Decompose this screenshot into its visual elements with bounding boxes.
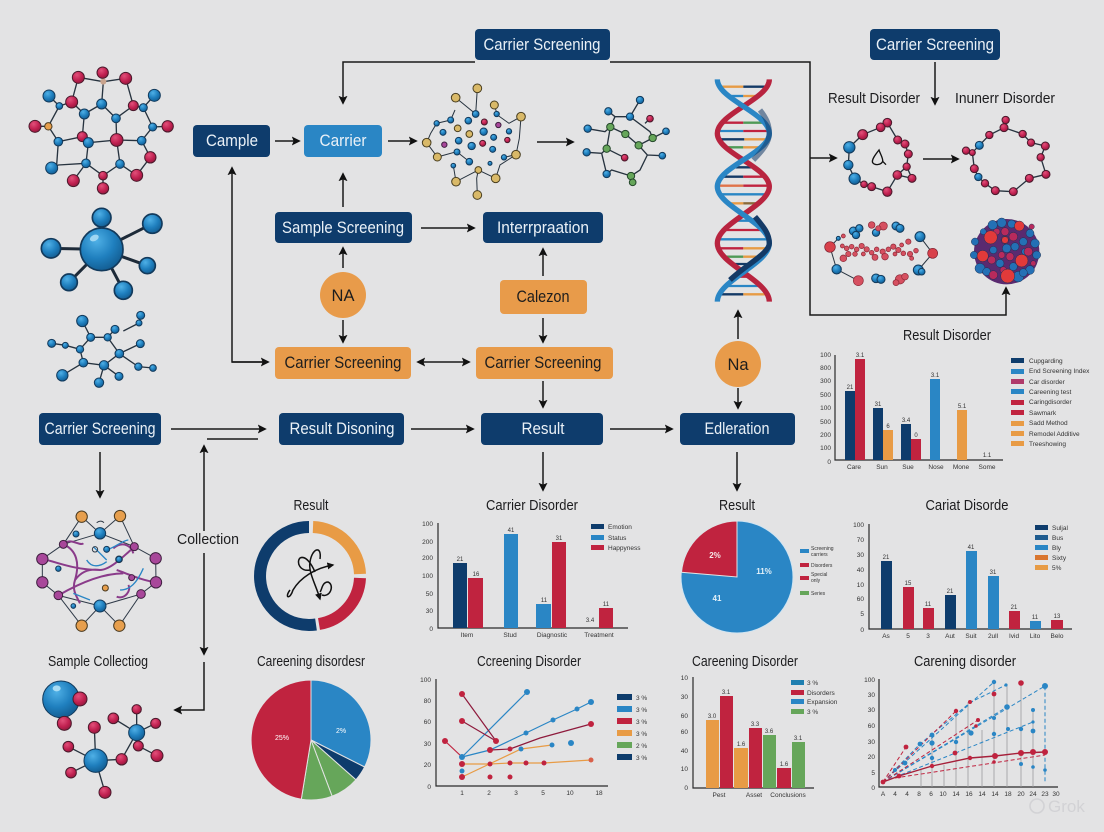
- legend: line chart: 3 %: [636, 755, 647, 762]
- bar chart: careening disorder: Asset: [746, 792, 762, 799]
- legend: carrier disorder: Happyness: [608, 545, 641, 552]
- bar chart: cariat disorde: 11: [1032, 615, 1039, 621]
- title: cariat disorde: Cariat Disorde: [926, 498, 1008, 514]
- bar chart: cariat disorde: [853, 522, 1072, 640]
- box: carrier screening left: Carrier Screening: [44, 420, 156, 438]
- title: sample collectiog: Sample Collectiog: [48, 654, 148, 670]
- legend: result pie: Screening: [811, 546, 834, 552]
- title: result pie: Result: [719, 498, 755, 514]
- scatter line chart: carening disorder: 14: [952, 791, 960, 798]
- bar chart: careening disorder: [681, 675, 814, 799]
- pie labels: 25%: [275, 735, 289, 742]
- bar chart: cariat disorde: Suit: [965, 633, 977, 640]
- bar chart: result disorder: 0: [827, 459, 831, 466]
- icon: big hub molecule: [41, 208, 162, 299]
- bar chart: result disorder: 200: [820, 432, 831, 439]
- legend: cariat disorde: [1035, 525, 1068, 572]
- bar chart: carrier disorder: 31: [556, 536, 563, 542]
- icon: ring molecule left: [844, 118, 916, 196]
- legend: result disorder: Remodel Additive: [1029, 431, 1080, 438]
- box: carrier screening left: [39, 413, 161, 445]
- pie chart: result: 11%: [756, 567, 772, 576]
- bar chart: careening disorder: 40: [681, 748, 688, 755]
- bar chart: careening disorder: 0: [684, 785, 688, 792]
- legend: result disorder: Careening test: [1029, 389, 1071, 396]
- bar chart: cariat disorde: 2ull: [988, 633, 999, 640]
- legend: result pie: Special: [811, 572, 827, 578]
- bar chart: result disorder: 3.4: [902, 418, 911, 424]
- bar chart: result disorder: 21: [847, 385, 854, 391]
- bar chart: carrier disorder: 21: [457, 557, 464, 563]
- box: carrier screening top: [475, 29, 610, 60]
- legend: carrier disorder: [591, 524, 641, 552]
- bar chart: result disorder: 100: [820, 405, 831, 412]
- bar chart: carrier disorder: 100: [422, 521, 433, 528]
- legend: careening disorder: Disorders: [807, 690, 836, 697]
- legend: careening disorder: 3 %: [807, 680, 818, 687]
- squiggle arrows in donut: [287, 550, 333, 599]
- scatter line chart: carening disorder: 18: [1004, 791, 1012, 798]
- circle: NA: NA: [332, 287, 354, 305]
- title: ccreening disorder: Ccreening Disorder: [477, 654, 581, 670]
- watermark: grok: [1030, 797, 1085, 816]
- box: carrier: Carrier: [320, 132, 367, 150]
- label: collection: Collection: [177, 532, 239, 548]
- title: careening disorder: Careening Disorder: [692, 654, 798, 670]
- bar chart: careening disorder: 10: [681, 675, 688, 682]
- bar chart: cariat disorde: 70: [857, 537, 864, 544]
- bar chart: result disorder: Sun: [876, 464, 888, 471]
- line chart: ccreening disorder: 5: [541, 790, 545, 797]
- bar chart: result disorder: 5.1: [958, 404, 967, 410]
- scatter line chart: carening disorder: 23: [1041, 791, 1049, 798]
- bar chart: cariat disorde: As: [882, 633, 891, 640]
- bar chart: careening disorder: 30: [681, 694, 688, 701]
- box: result: Result: [522, 420, 565, 438]
- bar chart: carrier disorder: 200: [422, 555, 433, 562]
- legend: cariat disorde: 5%: [1052, 565, 1062, 572]
- box: cample: [193, 125, 270, 157]
- legend: line chart: 3 %: [636, 695, 647, 702]
- legend: result pie: [800, 546, 834, 597]
- legend: careening disorder: [791, 680, 838, 716]
- bar chart: cariat disorde: 13: [1054, 614, 1061, 620]
- icon: clustered red and blue molecule: [825, 222, 938, 286]
- bar chart: carrier disorder: Diagnostic: [537, 632, 568, 639]
- icon: complex purple network: [37, 510, 162, 631]
- box: edleration: Edleration: [704, 420, 770, 438]
- bar chart: cariat disorde: 11: [925, 602, 932, 608]
- bar chart: result disorder: 500: [820, 419, 831, 426]
- legend: result disorder: [1011, 358, 1090, 448]
- box: cample: Cample: [206, 132, 258, 150]
- box: result disoning: Result Disoning: [290, 420, 394, 438]
- bar chart: cariat disorde: 41: [968, 545, 975, 551]
- scatter line chart: carening disorder: 0: [871, 785, 875, 792]
- legend: cariat disorde: Bus: [1052, 535, 1064, 542]
- scatter line chart: carening disorder: 10: [939, 791, 947, 798]
- legend: result pie: Disorders: [811, 563, 833, 569]
- line chart: ccreening disorder: 2: [487, 790, 491, 797]
- scatter line chart: carening disorder: 30: [1052, 791, 1060, 798]
- bar chart: result disorder: 100: [820, 352, 831, 359]
- scatter line chart: carening disorder: 5: [871, 770, 875, 777]
- legend: result disorder: Caringdisorder: [1029, 399, 1072, 406]
- legend: result disorder: End Screening Index: [1029, 368, 1090, 375]
- legend: result pie: only: [811, 578, 821, 584]
- bar chart: cariat disorde: Ivid: [1009, 633, 1019, 640]
- bar chart: result disorder: [820, 352, 1003, 471]
- watermark: grok: Grok: [1048, 797, 1085, 816]
- scatter line chart: carening disorder: A: [881, 791, 886, 798]
- legend: result pie: Series: [811, 591, 826, 597]
- legend: line chart: 3 %: [636, 731, 647, 738]
- legend: line chart: [617, 694, 647, 762]
- scatter line chart: carening disorder: 24: [1029, 791, 1037, 798]
- scatter line chart: carening disorder: 16: [965, 791, 973, 798]
- box: sample screening: [275, 212, 412, 243]
- scatter line chart: carening disorder: 20: [1017, 791, 1025, 798]
- box: carrier screening orange right: Carrier Screening: [484, 354, 602, 372]
- bar chart: carrier disorder: 3.4: [586, 618, 595, 624]
- bar chart: careening disorder: 3.3: [751, 722, 760, 728]
- box: result: [481, 413, 603, 445]
- legend: result disorder: Sawmark: [1029, 410, 1057, 417]
- box: carrier screening top right: [870, 29, 1000, 60]
- line chart: ccreening disorder: 10: [566, 790, 574, 797]
- bar chart: carrier disorder: 41: [508, 528, 515, 534]
- legend: careening disorder: Expansion: [807, 699, 838, 706]
- bar chart: cariat disorde: 21: [947, 589, 954, 595]
- circle: Na: Na: [727, 356, 749, 374]
- bar chart: cariat disorde: 5: [906, 633, 910, 640]
- pie labels: 2%: [336, 728, 346, 735]
- scatter line chart: carening disorder: 8: [917, 791, 921, 798]
- title: result donut: Result: [294, 498, 328, 514]
- bar chart: cariat disorde: 3: [926, 633, 930, 640]
- scatter line chart: carening disorder: 4: [905, 791, 909, 798]
- bar chart: careening disorder: 10: [681, 766, 688, 773]
- line chart: ccreening disorder: 30: [424, 741, 431, 748]
- legend: careening disorder: 3 %: [807, 709, 818, 716]
- icon: protein ball: [970, 218, 1041, 284]
- box: carrier screening orange right: [476, 347, 613, 379]
- bar chart: result disorder: 31: [875, 402, 882, 408]
- bar chart: cariat disorde: 40: [857, 567, 864, 574]
- title: carrier disorder: Carrier Disorder: [486, 498, 578, 514]
- scatter line chart: carening disorder: 30: [868, 739, 875, 746]
- scatter line chart: carening disorder: 30: [868, 707, 875, 714]
- bar chart: carrier disorder: 200: [422, 539, 433, 546]
- legend: carrier disorder: Emotion: [608, 524, 632, 531]
- box: calezon: [500, 280, 587, 314]
- bar chart: cariat disorde: Lito: [1030, 633, 1041, 640]
- legend: carrier disorder: Status: [608, 535, 627, 542]
- icon: molecule network top left: [29, 67, 173, 194]
- title: result disorder chart: Result Disorder: [903, 328, 991, 344]
- pie chart: result: [681, 521, 793, 633]
- bar chart: cariat disorde: 0: [860, 627, 864, 634]
- donut chart: result: [260, 527, 360, 625]
- pie labels: [275, 728, 346, 742]
- bar chart: result disorder: 800: [820, 365, 831, 372]
- scatter line chart: carening disorder: 6: [929, 791, 933, 798]
- box: carrier screening top right: Carrier Screening: [876, 36, 994, 54]
- legend: result disorder: Car disorder: [1029, 379, 1066, 386]
- scatter line chart: carening disorder: 14: [991, 791, 999, 798]
- bar chart: careening disorder: Conclusions: [770, 792, 806, 799]
- box: carrier screening orange left: Carrier Screening: [284, 354, 402, 372]
- line chart: ccreening disorder: 1: [460, 790, 464, 797]
- bar chart: result disorder: 3.1: [931, 373, 940, 379]
- bar chart: carrier disorder: 11: [541, 598, 548, 604]
- line chart: ccreening disorder: 80: [424, 698, 431, 705]
- icon: bottom left molecule with large sphere: [43, 681, 163, 798]
- bar chart: carrier disorder: Treatment: [584, 632, 614, 639]
- scatter line chart: carening disorder: 100: [864, 677, 875, 684]
- bar chart: cariat disorde: 30: [857, 552, 864, 559]
- legend: line chart: 3 %: [636, 707, 647, 714]
- line chart: ccreening disorder: 0: [427, 784, 431, 791]
- bar chart: cariat disorde: 21: [1011, 605, 1018, 611]
- bar chart: careening disorder: 1.6: [780, 762, 789, 768]
- box: interrpraation: [483, 212, 603, 243]
- bar chart: result disorder: 6: [886, 424, 890, 430]
- box: sample screening: Sample Screening: [282, 219, 404, 237]
- legend: cariat disorde: Bly: [1052, 545, 1062, 552]
- bar chart: carrier disorder: 50: [426, 591, 433, 598]
- bar chart: result disorder: Nose: [928, 464, 944, 471]
- legend: result disorder: Sadd Method: [1029, 420, 1068, 427]
- box: carrier screening orange left: [275, 347, 411, 379]
- bar chart: carrier disorder: Item: [461, 632, 473, 639]
- bar chart: result disorder: 300: [820, 378, 831, 385]
- pie chart: result: 2%: [709, 551, 721, 560]
- bar chart: carrier disorder: [422, 521, 628, 639]
- bar chart: carrier disorder: 16: [473, 572, 480, 578]
- circle: NA: [320, 272, 366, 318]
- bar chart: carrier disorder: Stud: [503, 632, 517, 639]
- box: carrier: [304, 125, 382, 157]
- line chart: ccreening disorder: 3: [514, 790, 518, 797]
- scatter line chart: carening disorder: 14: [978, 791, 986, 798]
- scatter line chart: carening disorder: 20: [868, 754, 875, 761]
- line chart: ccreening disorder: 100: [420, 677, 431, 684]
- bar chart: cariat disorde: 15: [905, 581, 912, 587]
- pie chart: result: 41: [713, 594, 722, 603]
- bar chart: careening disorder: 1.6: [737, 742, 746, 748]
- bar chart: result disorder: 3.1: [856, 353, 865, 359]
- bar chart: cariat disorde: Belo: [1050, 633, 1064, 640]
- icon: green and blue molecule: [583, 96, 669, 186]
- bar chart: cariat disorde: 10: [857, 582, 864, 589]
- bar chart: result disorder: Sue: [902, 464, 914, 471]
- bar chart: cariat disorde: 5: [860, 611, 864, 618]
- pie chart: careening disorder: [251, 680, 371, 800]
- legend: cariat disorde: Suljal: [1052, 525, 1068, 532]
- icon: DNA double helix: [717, 79, 770, 302]
- box: interrpraation: Interrpraation: [497, 219, 589, 237]
- title: carening disorder: Carening disorder: [914, 654, 1016, 670]
- title: careening disordesr: Careening disordesr: [257, 654, 365, 670]
- icon: ring molecule right: [962, 116, 1050, 196]
- bar chart: result disorder: 0: [914, 433, 918, 439]
- legend: line chart: 3 %: [636, 719, 647, 726]
- line chart: ccreening disorder: 60: [424, 719, 431, 726]
- scatter line chart: carening disorder: 30: [868, 692, 875, 699]
- line chart: ccreening disorder: 18: [595, 790, 603, 797]
- icon: small blue molecule: [48, 311, 156, 387]
- line chart: ccreening disorder: [420, 677, 608, 797]
- bar chart: cariat disorde: 100: [853, 522, 864, 529]
- legend: cariat disorde: Sixty: [1052, 555, 1067, 562]
- scatter line chart: carening disorder: 4: [893, 791, 897, 798]
- bar chart: careening disorder: 3.1: [794, 736, 803, 742]
- bar chart: careening disorder: 3.1: [722, 690, 731, 696]
- bar chart: cariat disorde: 60: [857, 596, 864, 603]
- bar chart: careening disorder: 60: [681, 713, 688, 720]
- box: carrier screening top: Carrier Screening: [484, 36, 600, 54]
- scatter line chart: carening disorder: [864, 677, 1060, 798]
- legend: line chart: 2 %: [636, 743, 647, 750]
- bar chart: careening disorder: 60: [681, 729, 688, 736]
- bar chart: cariat disorde: 21: [883, 555, 890, 561]
- bar chart: cariat disorde: Aut: [945, 633, 955, 640]
- bar chart: carrier disorder: 11: [603, 602, 610, 608]
- bar chart: result disorder: Some: [979, 464, 996, 471]
- box: edleration: [680, 413, 795, 445]
- scatter line chart: carening disorder: 60: [868, 723, 875, 730]
- label: result disorder: Result Disorder: [828, 91, 920, 107]
- legend: result disorder: Treeshowing: [1029, 441, 1066, 448]
- bar chart: careening disorder: 3.6: [765, 729, 774, 735]
- circle: Na: [715, 341, 761, 387]
- connector arrows: [100, 62, 1006, 710]
- bar chart: result disorder: 1.1: [983, 453, 992, 459]
- bar chart: careening disorder: Pest: [712, 792, 726, 799]
- bar chart: careening disorder: 3.0: [708, 714, 717, 720]
- icon: dense molecule with yellow nodes: [422, 84, 525, 199]
- line chart: ccreening disorder: 20: [424, 762, 431, 769]
- bar chart: result disorder: Mone: [953, 464, 970, 471]
- label: inunerr disorder: Inunerr Disorder: [955, 91, 1055, 107]
- bar chart: carrier disorder: 0: [429, 626, 433, 633]
- bar chart: carrier disorder: 30: [426, 608, 433, 615]
- legend: result pie: carriers: [811, 552, 828, 558]
- bar chart: cariat disorde: 31: [990, 570, 997, 576]
- bar chart: result disorder: 500: [820, 392, 831, 399]
- box: calezon: Calezon: [516, 288, 570, 306]
- legend: result disorder: Cupgarding: [1029, 358, 1063, 365]
- bar chart: carrier disorder: 100: [422, 573, 433, 580]
- bar chart: result disorder: 100: [820, 445, 831, 452]
- bar chart: result disorder: Care: [847, 464, 861, 471]
- box: result disoning: [279, 413, 404, 445]
